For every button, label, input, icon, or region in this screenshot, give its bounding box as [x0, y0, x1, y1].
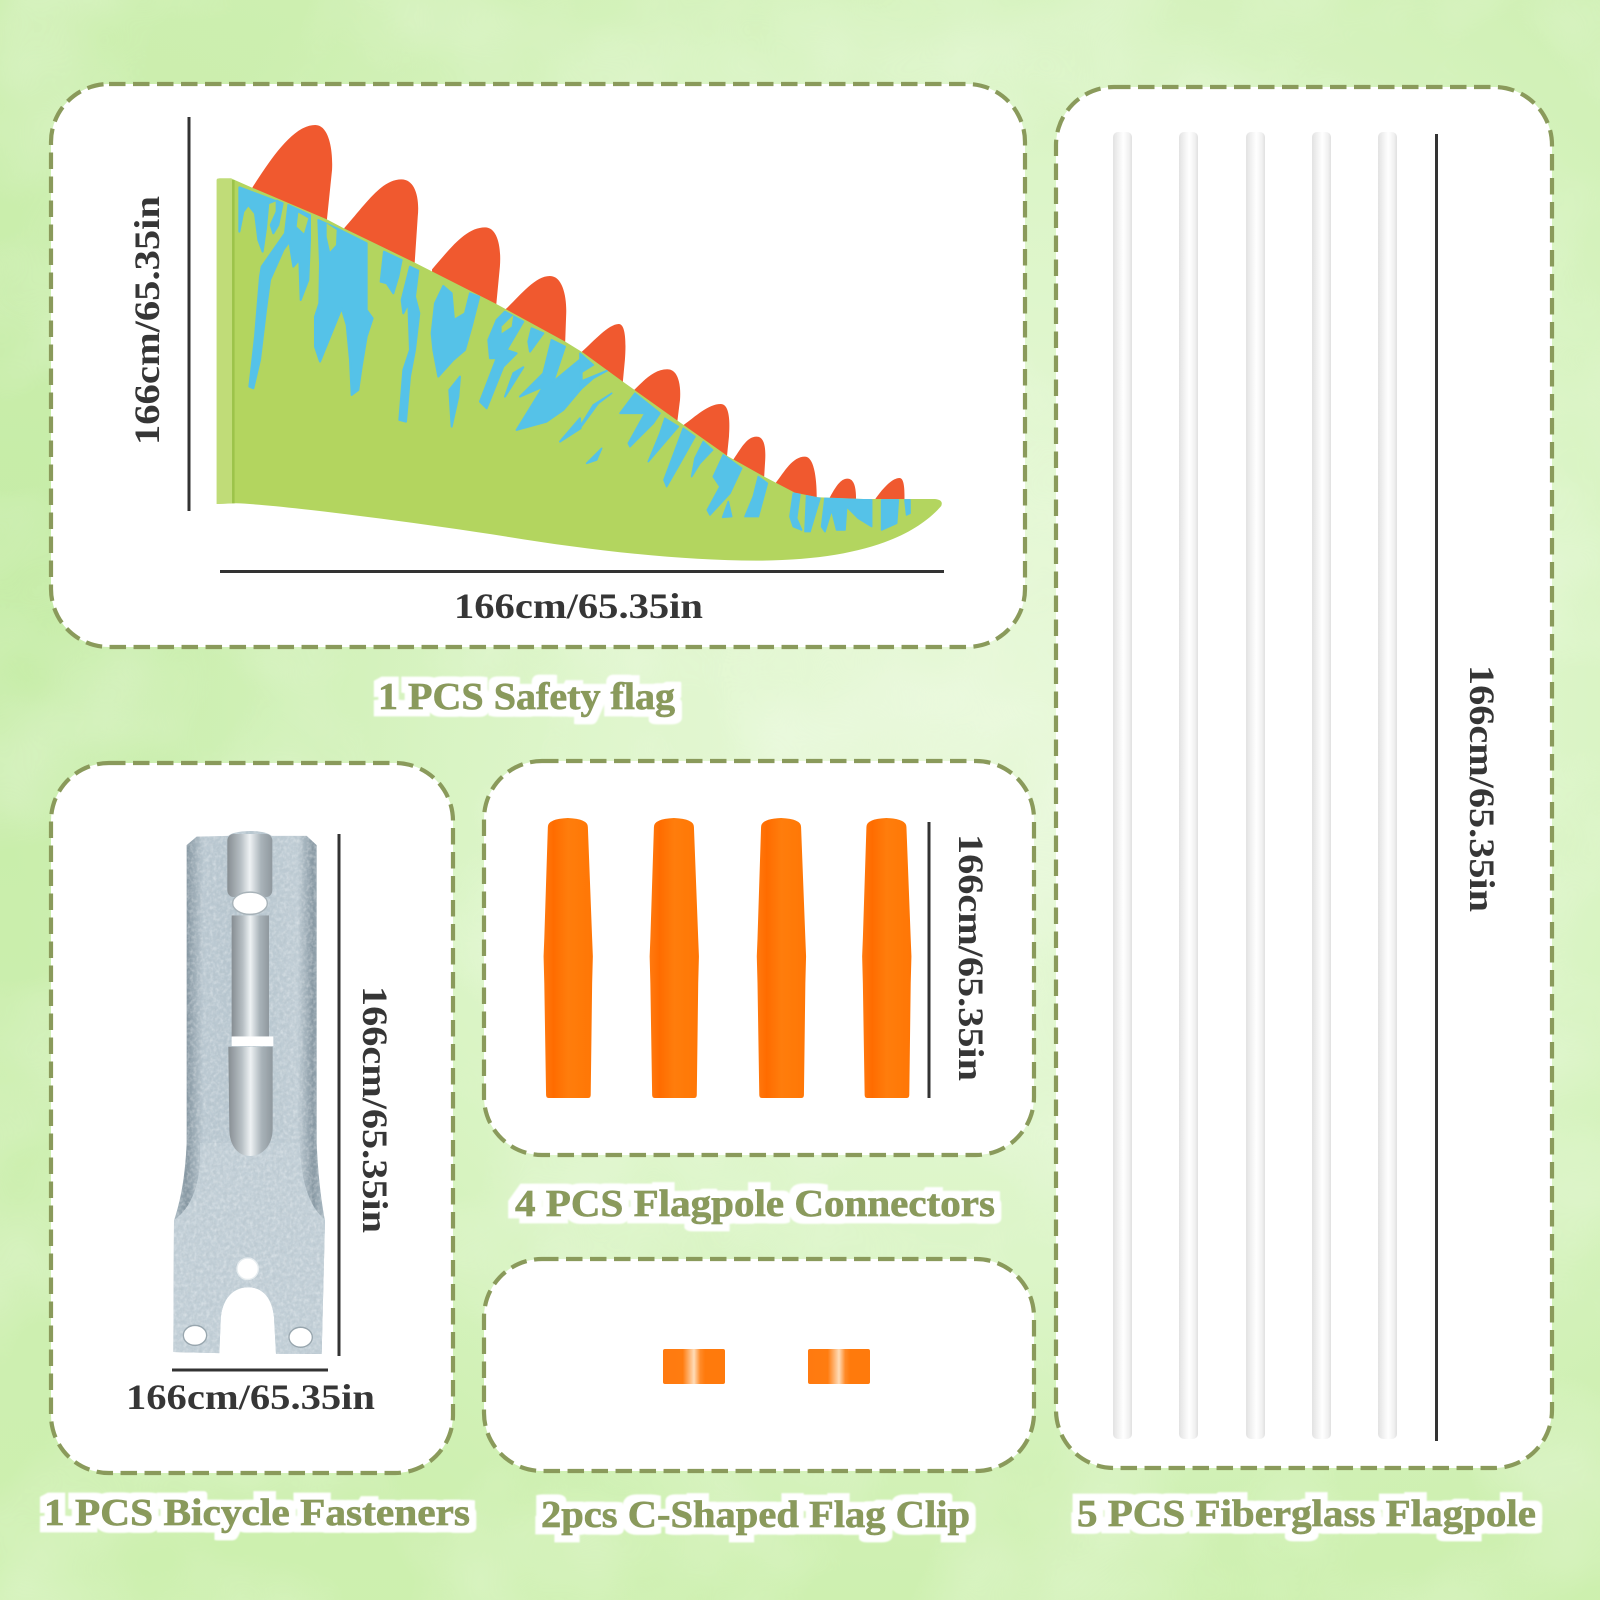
icon: flagpoles — [1113, 132, 1397, 1439]
dimension: flag height: 166cm/65.35in — [127, 196, 167, 445]
flag pole sleeve — [217, 178, 233, 504]
dimension: bracket width: 166cm/65.35in — [126, 1377, 375, 1417]
dimension: pole length: 166cm/65.35in — [1462, 665, 1502, 912]
panel: fiberglass flagpoles — [1056, 87, 1552, 1468]
panel: safety flag — [51, 84, 1025, 647]
panel: bicycle fasteners — [51, 763, 453, 1473]
label: safety flag: 1 PCS Safety flag — [378, 676, 675, 718]
icon: orange clip right — [808, 1349, 870, 1384]
blue pattern — [239, 187, 910, 532]
icon: metal bracket — [170, 828, 330, 1358]
dimension: connector height: 166cm/65.35in — [951, 834, 991, 1081]
panel: flagpole connectors — [484, 761, 1034, 1155]
panel: flag clips — [484, 1259, 1034, 1471]
green flecks — [297, 213, 513, 333]
label: bicycle fasteners: 1 PCS Bicycle Fasteners — [44, 1492, 470, 1534]
flag spines — [252, 125, 904, 507]
label: flag clips: 2pcs C-Shaped Flag Clip — [541, 1494, 970, 1536]
dimension: flag width: 166cm/65.35in — [454, 586, 703, 626]
flag body — [217, 178, 942, 561]
icon: dinosaur safety flag — [217, 125, 942, 561]
icon: orange clip left — [663, 1349, 725, 1384]
icon: orange connectors — [544, 818, 911, 1098]
label: fiberglass flagpoles: 5 PCS Fiberglass Flagpole — [1077, 1493, 1536, 1535]
label: flagpole connectors: 4 PCS Flagpole Connectors — [515, 1183, 995, 1225]
dimension: bracket height: 166cm/65.35in — [355, 986, 395, 1233]
